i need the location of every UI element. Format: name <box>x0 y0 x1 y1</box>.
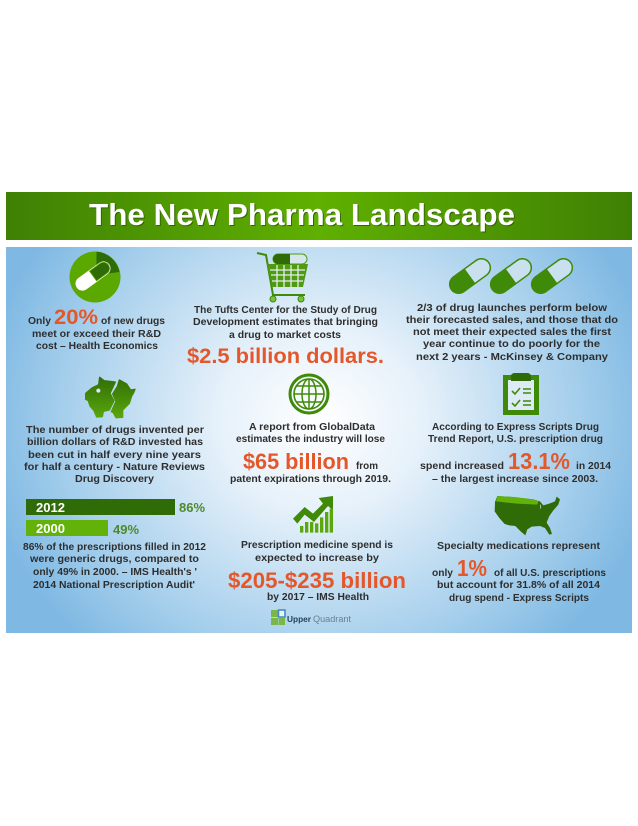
text: Express Scripts trend: in 2014 <box>576 460 611 472</box>
text: Express Scripts trend: Trend Report, U.S. prescription drug <box>428 433 603 445</box>
text: Express Scripts trend: – the largest increase since 2003. <box>432 473 598 485</box>
logo: Upper Quadrant: Upper <box>287 614 312 624</box>
text: specialty medications: only <box>432 567 453 579</box>
text: drugs invented per billion: Drug Discovery <box>75 473 154 485</box>
text: prescription spend: expected to increase by <box>255 552 379 564</box>
title: The New Pharma Landscape <box>90 199 516 233</box>
bar chart: generic prescriptions: 86% <box>179 500 205 515</box>
bar chart: generic prescriptions: 49% <box>113 522 139 537</box>
text: 20 percent stat <box>28 306 165 352</box>
text: drugs invented per billion: been cut in half every nine years <box>28 449 201 461</box>
text: GlobalData stat <box>230 421 391 485</box>
icon: globe <box>290 375 328 413</box>
text: specialty medications: but account for 31.8% of all 2014 <box>437 579 600 591</box>
text: drug launches: year continue to do poorly for the <box>423 338 600 350</box>
text: prescription spend: Prescription medicine spend is <box>241 539 393 551</box>
text: specialty medications <box>432 540 606 604</box>
text: generic drugs <box>23 541 206 591</box>
text: 20 percent stat: meet or exceed their R&D <box>32 328 161 340</box>
text: drug launches: next 2 years - McKinsey & Company <box>416 351 608 363</box>
text: Tufts Center stat <box>187 304 384 368</box>
logo: Upper Quadrant: Quadrant <box>313 614 351 624</box>
text: GlobalData stat: from <box>356 460 378 472</box>
text: drug launches: not meet their expected sales the first <box>413 326 612 338</box>
text: Express Scripts trend: spend increased <box>420 460 504 472</box>
logo: Upper Quadrant <box>271 610 351 625</box>
text: specialty medications: 1% <box>457 555 487 581</box>
icon: clipboard checklist <box>503 373 539 415</box>
text: GlobalData stat: A report from GlobalData <box>249 421 375 433</box>
text: GlobalData stat: estimates the industry will lose <box>236 433 385 445</box>
bar chart: generic prescriptions <box>26 499 205 537</box>
text: drug launches <box>406 302 618 363</box>
bar chart: generic prescriptions: 2000 <box>36 521 65 536</box>
text: 20 percent stat: Only <box>28 315 51 327</box>
text: drug launches: 2/3 of drug launches perform below <box>417 302 608 314</box>
text: prescription spend <box>228 539 406 603</box>
text: GlobalData stat: $65 billion <box>243 449 349 474</box>
text: specialty medications: drug spend - Express Scripts <box>449 592 589 604</box>
panel: main blue background <box>6 247 632 633</box>
text: 20 percent stat: cost – Health Economics <box>36 340 158 352</box>
text: Express Scripts trend: 13.1% <box>508 448 570 474</box>
icon: map of USA <box>495 496 560 535</box>
text: generic drugs: only 49% in 2000. – IMS Health's ' <box>33 566 197 578</box>
text: 20 percent stat: of new drugs <box>101 315 165 327</box>
text: Tufts Center stat: $2.5 billion dollars. <box>187 345 384 368</box>
text: Tufts Center stat: Development estimates that bringing <box>193 316 378 328</box>
text: drugs invented per billion: billion dollars of R&D invested has <box>27 436 203 448</box>
text: 20 percent stat: 20% <box>54 306 98 329</box>
text: Express Scripts trend: According to Express Scripts Drug <box>432 421 599 433</box>
text: drugs invented per billion <box>24 424 205 485</box>
icon: broken piggy bank <box>86 377 135 418</box>
text: prescription spend: $205-$235 billion <box>228 568 406 593</box>
text: drugs invented per billion: The number of drugs invented per <box>26 424 204 436</box>
icon: shopping cart with capsule <box>257 253 308 302</box>
text: specialty medications: of all U.S. prescriptions <box>494 567 606 579</box>
text: Tufts Center stat: The Tufts Center for the Study of Drug <box>194 304 377 316</box>
text: GlobalData stat: patent expirations through 2019. <box>230 473 391 485</box>
text: generic drugs: were generic drugs, compared to <box>29 553 199 565</box>
text: generic drugs: 86% of the prescriptions filled in 2012 <box>23 541 206 553</box>
text: Tufts Center stat: a drug to market costs <box>229 329 341 341</box>
header banner <box>6 192 632 240</box>
title: The New Pharma Landscape <box>89 198 515 232</box>
icon: rising chart arrow <box>293 496 333 533</box>
text: drugs invented per billion: for half a century - Nature Reviews <box>24 461 205 473</box>
text: prescription spend: by 2017 – IMS Health <box>267 591 369 603</box>
icon: pie chart with capsule <box>70 252 120 302</box>
bar chart: generic prescriptions: 2012 <box>36 500 65 515</box>
text: drug launches: their forecasted sales, and those that do <box>406 314 618 326</box>
text: generic drugs: 2014 National Prescription Audit' <box>33 579 195 591</box>
icon: three capsules <box>446 255 576 297</box>
text: specialty medications: Specialty medications represent <box>437 540 600 552</box>
text: Express Scripts trend <box>420 421 611 485</box>
